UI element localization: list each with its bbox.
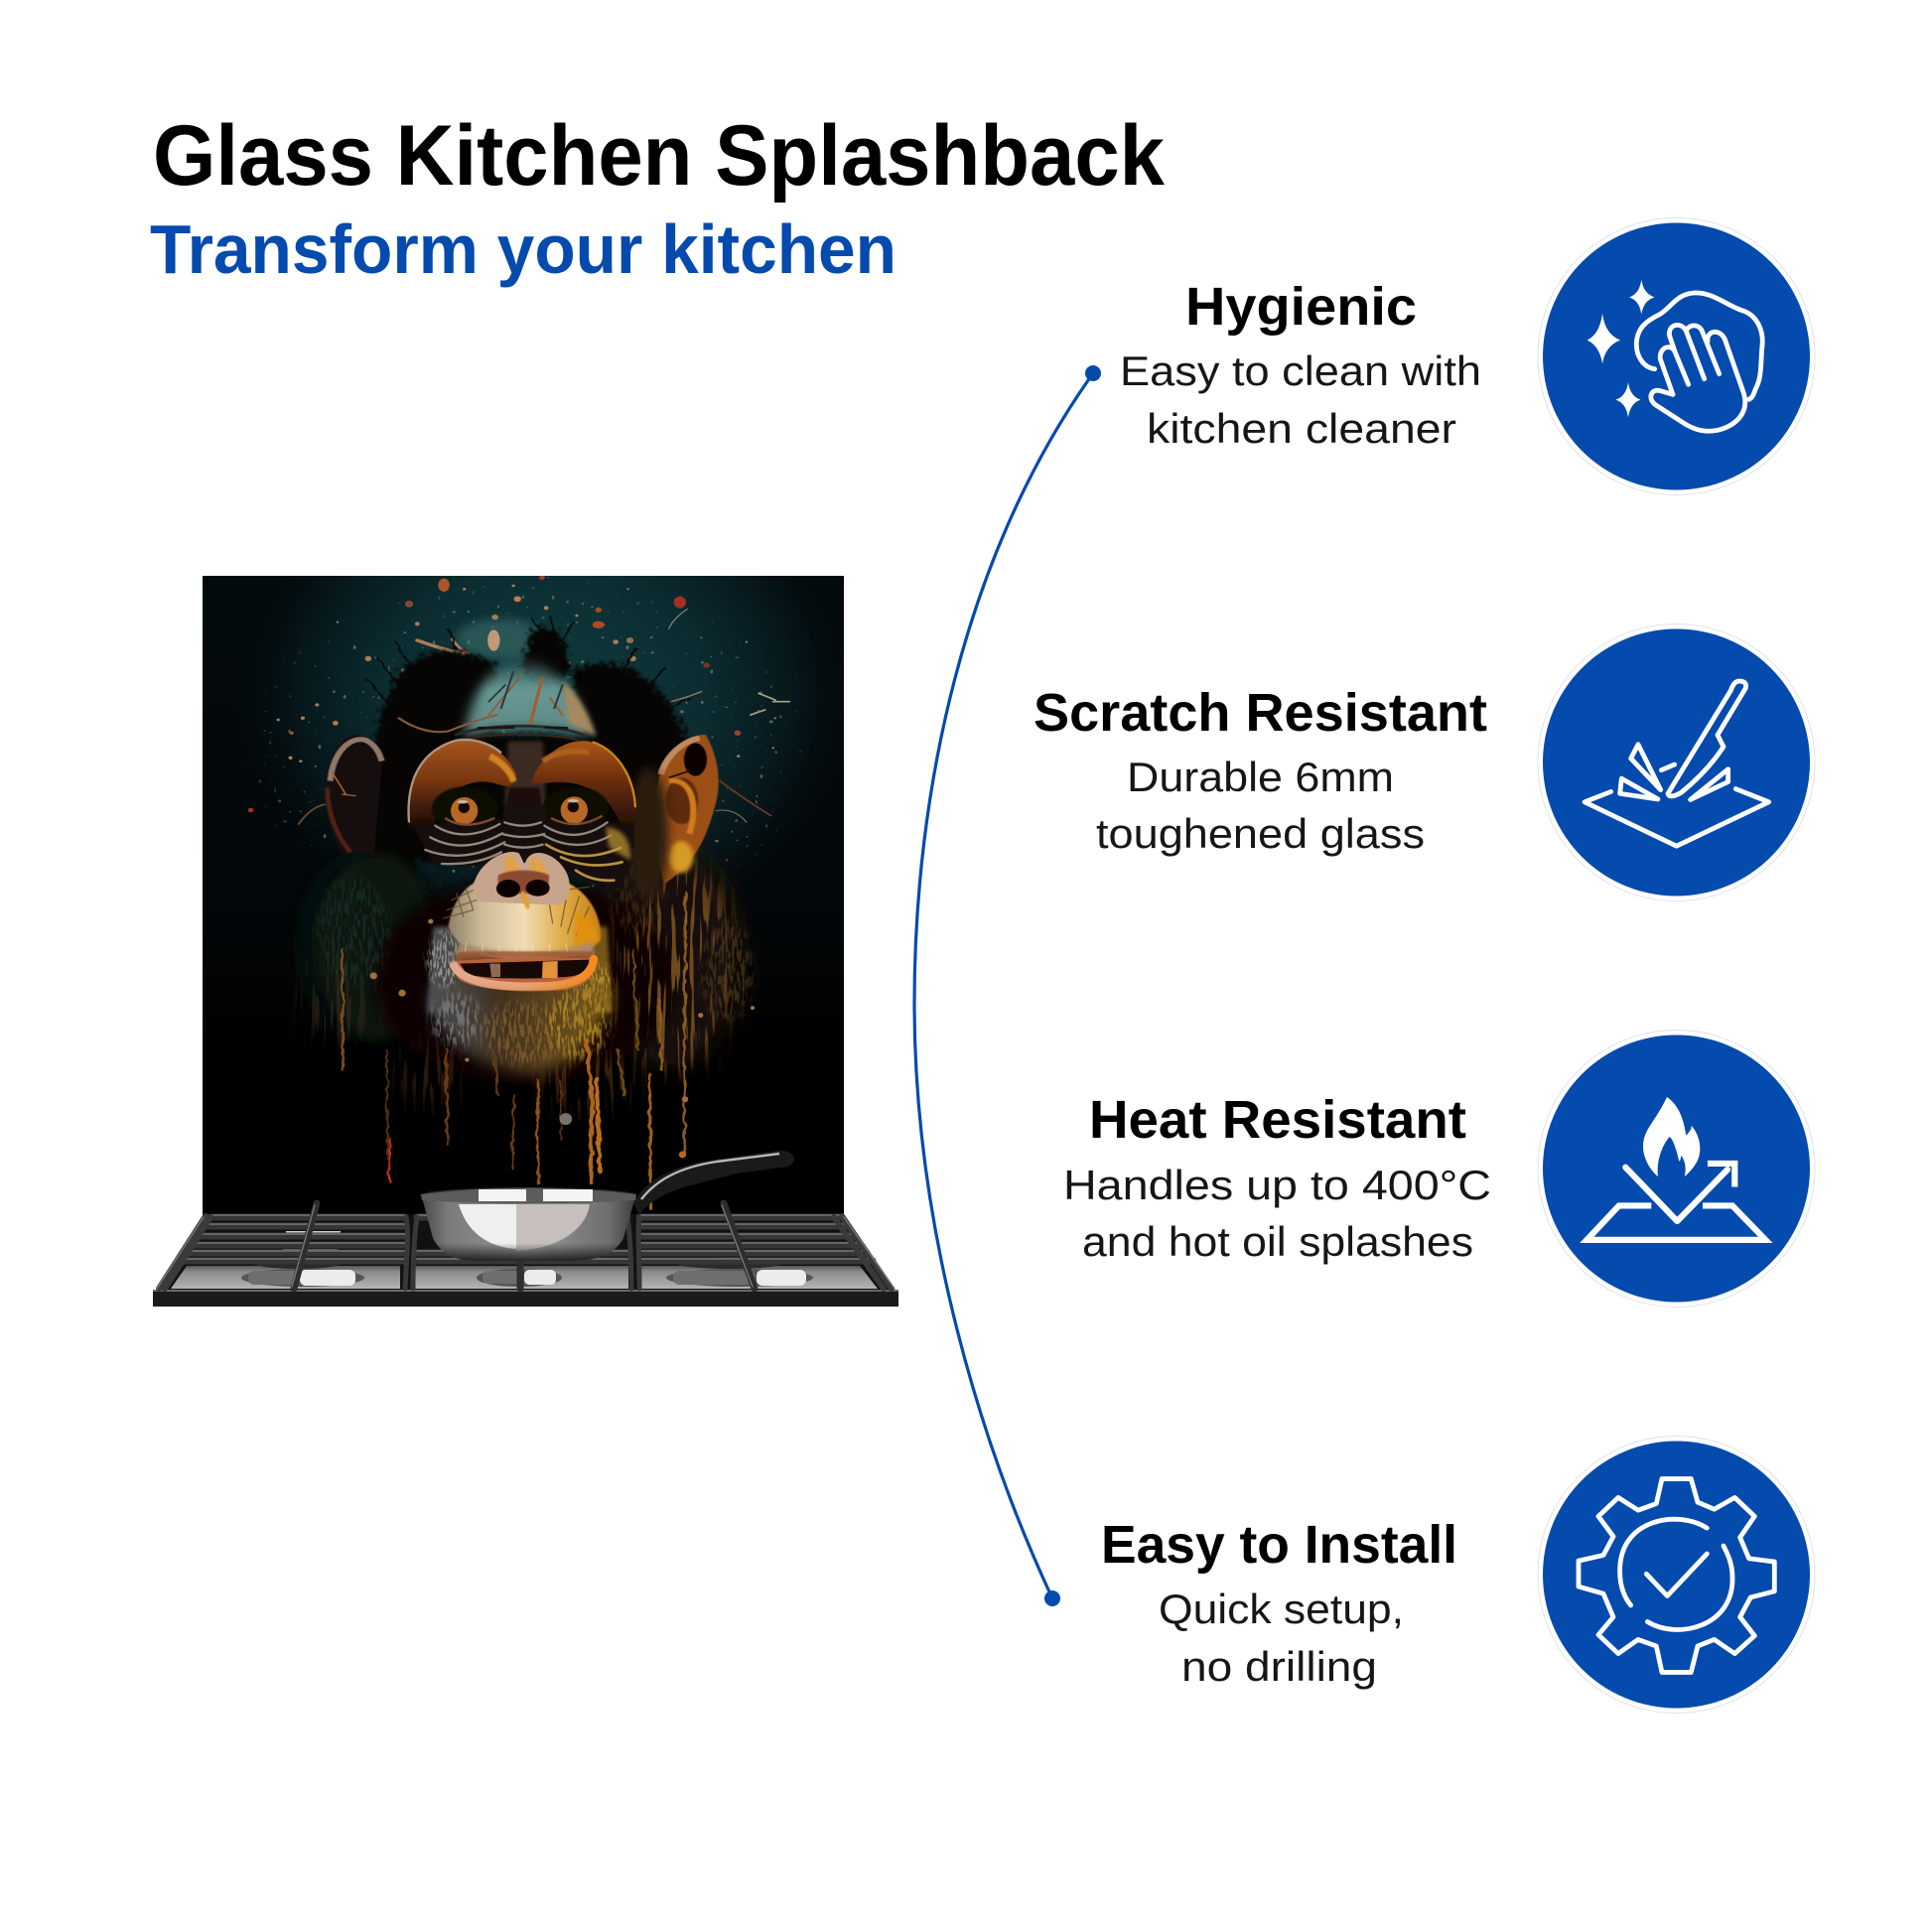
feature: Easy to Install xyxy=(1101,1515,1457,1690)
icon: flame on glass xyxy=(1538,1031,1815,1307)
feature: Easy to Install: Easy to Install xyxy=(1101,1515,1457,1575)
hair mass xyxy=(366,627,689,874)
feature: Scratch Resistant: Scratch Resistant xyxy=(1034,683,1487,743)
feature: Scratch Resistant: toughened glass xyxy=(1096,810,1425,857)
wrinkles xyxy=(425,822,622,881)
subtitle: Transform your kitchen xyxy=(150,210,897,288)
feature: Heat Resistant xyxy=(1063,1090,1491,1265)
product image: splashback above hob xyxy=(153,576,898,1307)
bridge between brows xyxy=(504,742,546,807)
feature: Hygienic xyxy=(1120,277,1481,452)
hob grate xyxy=(157,1203,895,1289)
nose xyxy=(474,852,570,905)
side shading xyxy=(628,767,668,900)
feature: Hygienic: Hygienic xyxy=(1185,277,1417,337)
spray behind head (crop coordinates) xyxy=(248,575,789,824)
feature: Heat Resistant: Heat Resistant xyxy=(1089,1090,1466,1150)
frying pan xyxy=(420,1151,794,1261)
fine specks around head xyxy=(258,586,794,923)
eye sockets xyxy=(431,786,464,820)
forehead xyxy=(399,655,596,740)
connector curve xyxy=(914,365,1101,1606)
brows xyxy=(408,740,516,827)
hair fray strokes xyxy=(366,616,689,708)
glass panel with chimpanzee artwork xyxy=(203,576,844,1215)
icon: hand wiping with sparkles xyxy=(1538,218,1815,494)
feature: Scratch Resistant xyxy=(1034,683,1487,857)
soft fur glow behind lower head xyxy=(312,852,732,1059)
icon: knife scratching glass xyxy=(1538,623,1815,901)
lower hair xyxy=(301,848,753,1109)
hob base xyxy=(153,1214,898,1307)
face xyxy=(408,740,668,1013)
mouth xyxy=(453,958,595,992)
feature: Hygienic: kitchen cleaner xyxy=(1147,405,1456,452)
title: Glass Kitchen Splashback xyxy=(153,108,1165,204)
feature: Heat Resistant: Handles up to 400°C xyxy=(1063,1162,1491,1208)
muzzle xyxy=(449,881,601,960)
feature: Heat Resistant: and hot oil splashes xyxy=(1082,1218,1473,1265)
feature: Scratch Resistant: Durable 6mm xyxy=(1127,754,1394,800)
beard fringe xyxy=(427,926,613,1013)
wrinkled cheek bed xyxy=(414,817,634,894)
ears xyxy=(326,735,719,884)
feature: Easy to Install: no drilling xyxy=(1181,1643,1377,1690)
icon: gear with check mark xyxy=(1538,1436,1815,1714)
feature: Hygienic: Easy to clean with xyxy=(1120,347,1481,394)
lower beard xyxy=(343,892,755,1208)
eyes xyxy=(451,797,478,824)
hob burners xyxy=(241,1231,813,1287)
drips xyxy=(343,892,685,1208)
feature: Easy to Install: Quick setup, xyxy=(1159,1586,1404,1632)
